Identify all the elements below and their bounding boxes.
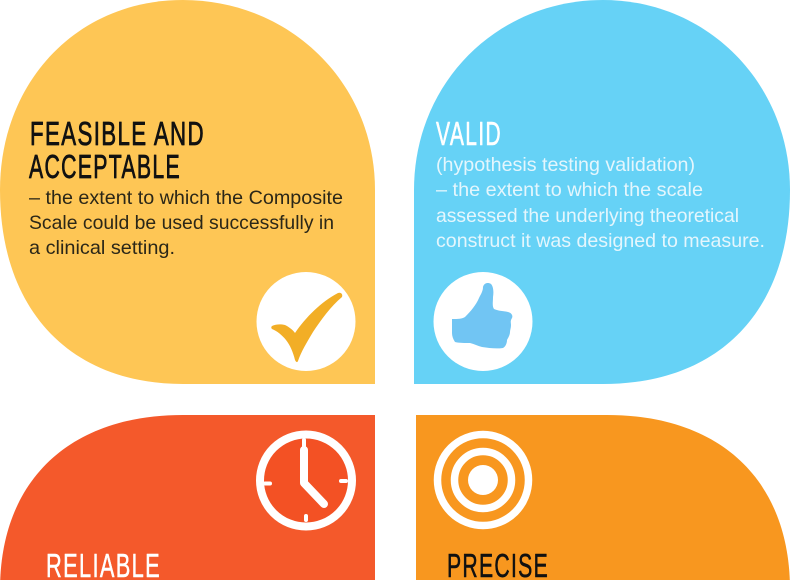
body text: valid: assessed the underlying theoretical	[436, 205, 739, 227]
body text: feasible	[29, 187, 343, 259]
body text: valid: construct it was designed to measure.	[436, 230, 765, 252]
body text: feasible: Scale could be used successfully in	[29, 212, 334, 234]
body text: feasible: a clinical setting.	[29, 237, 175, 259]
body text: valid: (hypothesis testing validation)	[436, 154, 695, 176]
icon: target	[438, 434, 528, 526]
heading: feasible and acceptable	[29, 115, 205, 185]
body text: feasible: – the extent to which the Composite	[29, 187, 343, 209]
icon: check mark	[256, 272, 356, 371]
panel: valid	[414, 0, 790, 384]
heading: feasible and acceptable: FEASIBLE AND	[30, 115, 205, 152]
blue petal shape	[414, 0, 790, 384]
red-orange petal shape	[0, 415, 375, 580]
heading: valid: VALID	[436, 115, 502, 152]
heading: feasible and acceptable: ACCEPTABLE	[29, 148, 181, 185]
orange petal shape	[416, 415, 790, 580]
body text: valid	[436, 154, 765, 252]
panel: reliable	[0, 415, 375, 580]
panel: feasible and acceptable	[0, 0, 375, 384]
body text: valid: – the extent to which the scale	[436, 179, 703, 201]
yellow petal shape	[0, 0, 375, 384]
icon: thumbs up	[434, 272, 532, 371]
icon: clock	[260, 434, 352, 526]
panel: precise	[416, 415, 790, 580]
